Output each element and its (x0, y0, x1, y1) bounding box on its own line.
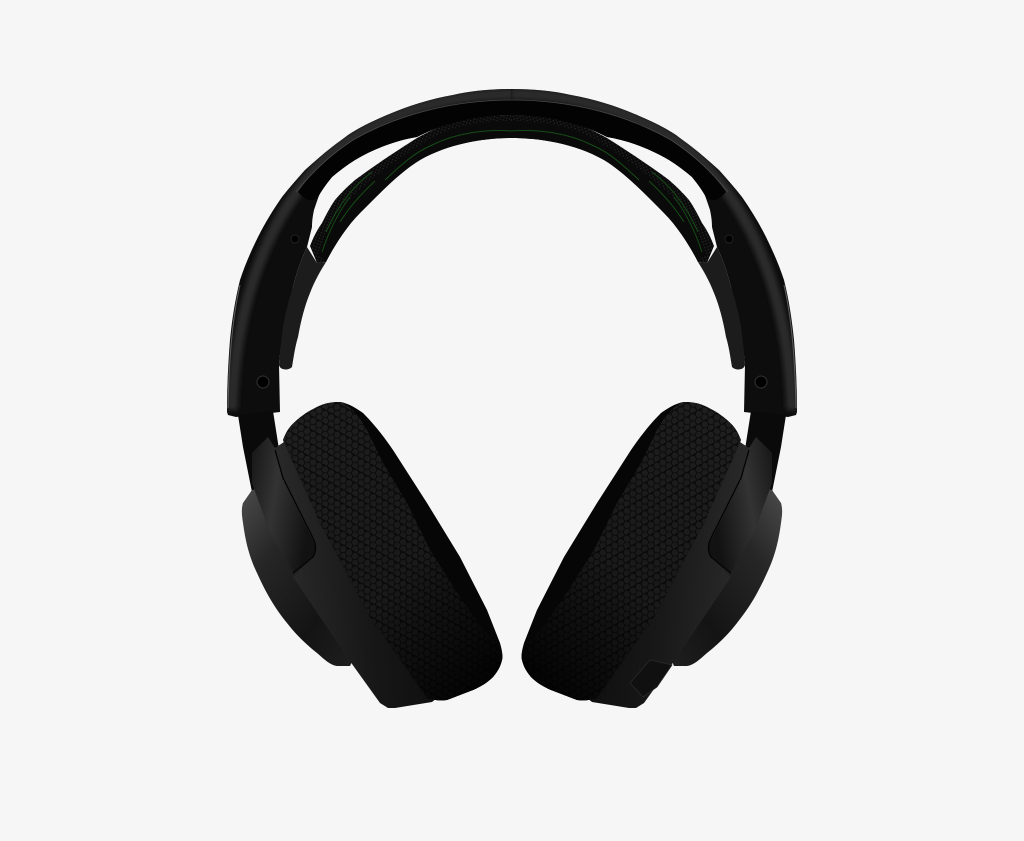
headband arch (227, 89, 513, 417)
lower screw hole (257, 376, 269, 388)
headband padding (310, 115, 513, 263)
ear pad shading (283, 402, 502, 700)
ear cup back (242, 480, 380, 666)
band outer soft sheen (232, 94, 513, 410)
right cup button (630, 660, 672, 697)
slider piece (279, 247, 326, 369)
ear pad hex texture (283, 402, 502, 700)
upper screw hole (291, 235, 299, 243)
ear pad body (283, 402, 502, 700)
band highlight line (296, 100, 513, 192)
ear cup ring (275, 438, 437, 708)
ring seam (275, 450, 316, 573)
yoke panel (252, 437, 315, 572)
band black lower section (298, 100, 513, 200)
right half of headset (mirror) (511, 89, 797, 708)
left half of headset (227, 89, 513, 708)
band edge highlight (228, 285, 240, 408)
yoke arm (238, 411, 284, 492)
illustration: black wireless headset, front view (227, 89, 797, 708)
